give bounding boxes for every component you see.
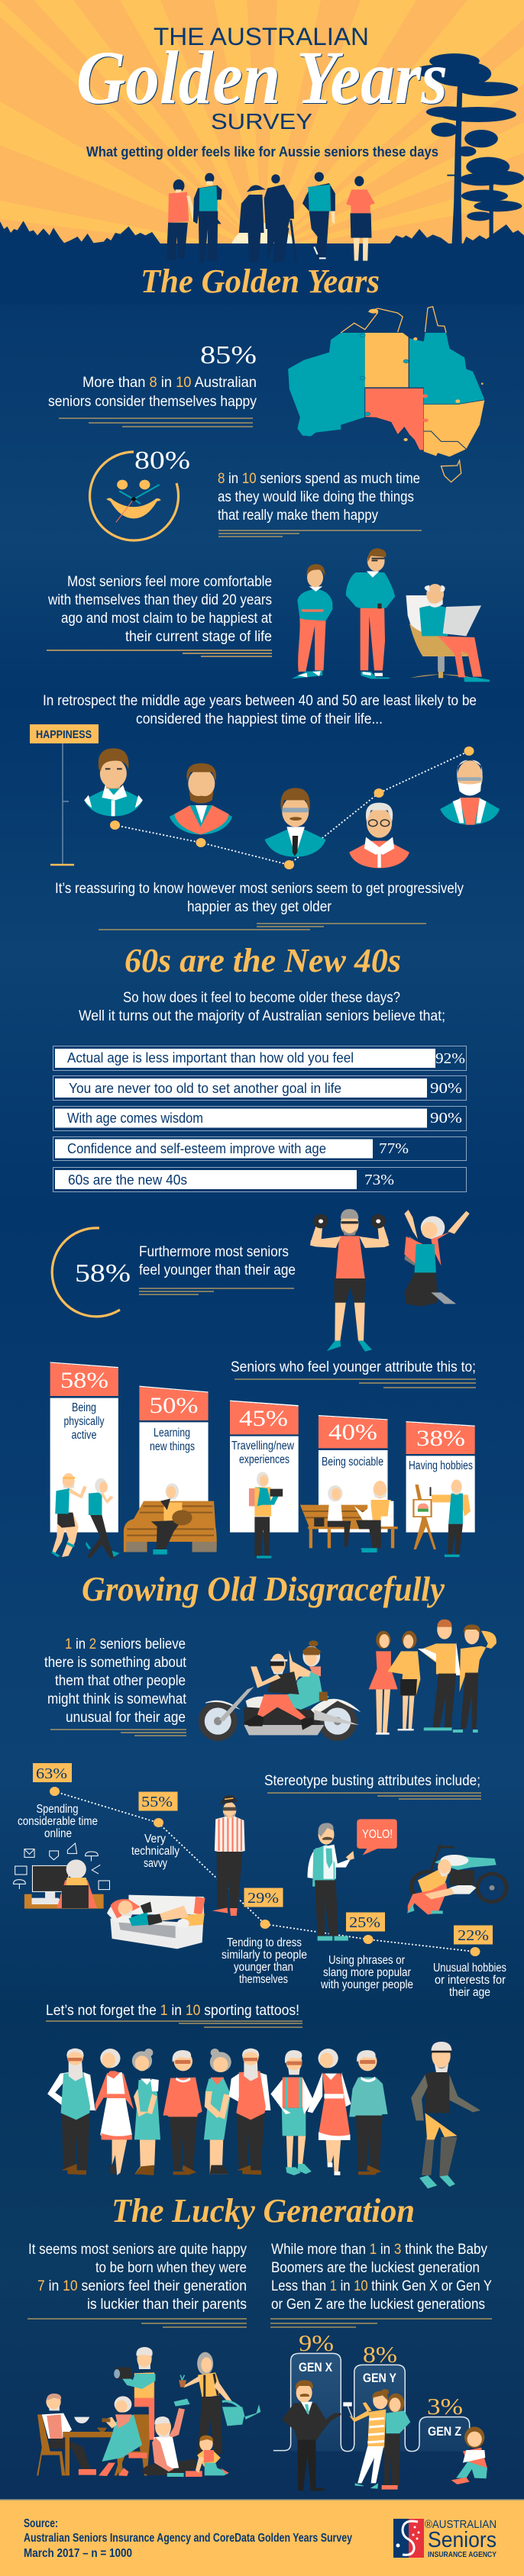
stat: 45 percent travelling: experiences	[239, 1453, 289, 1466]
text: intro: So how does it feel to become older these days?	[123, 990, 400, 1006]
panel: 80 percent time	[90, 447, 422, 540]
bar: 92 percent: Actual age is less important than how old you feel	[67, 1050, 354, 1066]
stat: 63 percent: considerable time	[18, 1815, 98, 1828]
illustration: couple on motorbike	[199, 1640, 361, 1741]
stat: 40 percent sociable	[322, 1420, 383, 1469]
illustration: hipster man	[212, 1795, 245, 1916]
text: lucky generation left: is luckier than their parents	[87, 2297, 247, 2313]
selfie girls	[343, 2389, 410, 2490]
sitting child	[451, 2426, 487, 2484]
stat: 29 percent: Tending to dress	[227, 1936, 302, 1949]
text: in retrospect: considered the happiest time of their life...	[136, 711, 383, 727]
labels: generation stats: 9%	[299, 2329, 334, 2356]
illustration: traveller with camera	[249, 1472, 283, 1559]
bar: 90 percent goal: 90%	[430, 1080, 462, 1097]
bar: 92 percent	[53, 1046, 466, 1070]
illustration: joggers	[52, 1473, 115, 1559]
illustration: three men	[292, 548, 490, 682]
stat: 38 percent hobbies	[409, 1426, 473, 1472]
glasses man	[346, 548, 395, 679]
subtitle: What getting older feels like for Aussie seniors these days	[86, 144, 438, 160]
text: unusual for their age	[66, 1710, 186, 1726]
icon: smiling clock	[90, 452, 179, 540]
bar: 77 percent: 77%	[379, 1140, 409, 1157]
woman	[167, 179, 198, 260]
senior 9	[349, 2050, 388, 2175]
text: reassuring: happier as they get older	[187, 899, 332, 915]
stat: 22 percent: Unusual hobbies	[433, 1962, 506, 1975]
labels: generation stats: GEN X	[299, 2360, 333, 2374]
seated man at table	[37, 2394, 96, 2475]
illustration: couple on bench	[300, 1481, 398, 1552]
text: 1 in 2 seniors believe	[65, 1636, 197, 1652]
senior 4	[163, 2050, 202, 2175]
labels: generation stats: GEN Z	[428, 2424, 461, 2439]
woman with watering can	[179, 2352, 260, 2454]
illustration: painter at easel	[412, 1479, 471, 1557]
bar: 90 percent goal	[53, 1076, 466, 1101]
stat: 50 percent learning: new things	[150, 1440, 195, 1453]
text: ago and most claim to be happiest at	[61, 611, 273, 627]
stat: 45 percent travelling	[231, 1406, 295, 1466]
face: older man	[349, 803, 409, 868]
bar: 90 percent wisdom: 90%	[430, 1110, 462, 1127]
text: Furthermore most seniors	[139, 1244, 289, 1260]
dotted trend line	[54, 1791, 475, 1952]
tree line and tall trees	[0, 53, 524, 244]
gen columns	[273, 2353, 470, 2452]
illustration: man with dumbbells	[310, 1209, 390, 1352]
bar: 90 percent wisdom	[53, 1107, 466, 1131]
source: March 2017 – n = 1000	[24, 2547, 132, 2560]
chart: stereotype busting attributes	[14, 1763, 509, 1999]
illustration: YOLO man	[307, 1823, 354, 1941]
boy	[346, 176, 375, 261]
logo: Australian Seniors Insurance Agency	[393, 2519, 497, 2559]
bar: 73 percent: 60s are the new 40s	[68, 1172, 187, 1188]
text: tattoos	[46, 2003, 302, 2027]
senior 2	[95, 2049, 134, 2175]
face: elderly bearded man	[440, 760, 500, 825]
stat: 80%	[134, 447, 190, 475]
man in teal	[193, 173, 222, 262]
stat: 63 percent: online	[44, 1827, 72, 1840]
labels: generation stats: 3%	[427, 2393, 463, 2420]
senior 1	[47, 2049, 95, 2175]
bar chart: beliefs	[53, 1046, 466, 1192]
face: man with moustache	[264, 788, 326, 857]
text: might think is somewhat	[47, 1691, 187, 1707]
text: there is something about	[44, 1655, 187, 1671]
stat: 29 percent: themselves	[239, 1973, 288, 1986]
shoes	[52, 1542, 377, 1557]
senior 8	[307, 2049, 351, 2175]
callout: YOLO	[357, 1819, 397, 1855]
ground	[0, 243, 524, 305]
stat: 25 percent	[320, 1913, 413, 1991]
logo: Australian Seniors Insurance Agency: ®AUSTRALIAN	[425, 2519, 497, 2531]
sun	[228, 223, 299, 293]
chart: luckiest generation	[273, 2329, 487, 2491]
stat: 58 percent physically active: 58%	[60, 1368, 108, 1393]
senior 7	[270, 2050, 313, 2175]
text: reassuring	[55, 881, 464, 930]
bar: 73 percent	[53, 1168, 466, 1192]
source: Australian Seniors Insurance Agency and CoreData Golden Years Survey	[24, 2532, 352, 2545]
stat: 25 percent: 25%	[349, 1914, 380, 1931]
senior 5	[204, 2049, 231, 2174]
illustration: man fixing motorbike	[407, 1845, 509, 1914]
text: lucky generation left: 7 in 10 seniors feel their generation	[37, 2278, 260, 2294]
text: lucky generation right: While more than 1 in 3 think the Baby	[271, 2242, 497, 2258]
stat: 25 percent: Using phrases or	[328, 1954, 405, 1967]
stat: 29 percent: younger than	[234, 1961, 293, 1974]
text: attributes intro	[231, 1359, 476, 1388]
column backgrounds	[50, 1362, 475, 1533]
text: that really make them happy	[218, 508, 378, 524]
stat: 63 percent: Spending	[37, 1803, 78, 1816]
man walking	[302, 172, 335, 260]
seated woman	[97, 2396, 152, 2476]
bar: 73 percent: 73%	[364, 1172, 394, 1188]
stat: 45 percent travelling: Travelling/new	[231, 1440, 295, 1452]
source: Source:	[24, 2517, 58, 2530]
stat: 50 percent learning: 50%	[150, 1393, 199, 1418]
stat: 45 percent travelling: 45%	[239, 1406, 288, 1431]
title	[76, 23, 448, 134]
title: SURVEY	[211, 110, 312, 134]
stat: 29 percent	[222, 1888, 307, 1986]
stat: 38 percent hobbies: Having hobbies	[409, 1459, 473, 1472]
logo: Australian Seniors Insurance Agency: Seniors	[428, 2528, 497, 2552]
labels: generation stats: 8%	[363, 2341, 397, 2368]
illustration: woman at computer with web icons	[14, 1843, 110, 1909]
stat: 58 percent physically active: Being	[72, 1401, 96, 1414]
heading: 60s are the New 40s: 60s are the New 40s	[125, 942, 401, 979]
text: More than 8 in 10 Australian	[82, 375, 259, 391]
illustration: woman reading on bench	[124, 1483, 217, 1555]
text: feel younger than their age	[139, 1262, 296, 1278]
text: seniors consider themselves happy	[48, 394, 257, 410]
panel: 85 percent happy	[48, 341, 257, 427]
face: bearded man	[170, 763, 232, 834]
text: them that other people	[55, 1673, 186, 1689]
chart: reasons for feeling younger	[50, 1362, 475, 1559]
bar: 77 percent: Confidence and self-esteem improve with age	[67, 1141, 326, 1156]
stat: 55 percent: 55%	[141, 1794, 173, 1810]
bar: 90 percent goal: You are never too old to set another goal in life	[69, 1081, 341, 1096]
text: lucky generation left	[27, 2242, 247, 2327]
suit man	[282, 2380, 341, 2491]
text: lucky generation right	[270, 2242, 492, 2327]
younger man	[292, 564, 332, 679]
man with camera	[114, 2347, 155, 2440]
stat: 58 percent physically active	[60, 1368, 108, 1442]
panel: 1 in 2 unusual	[44, 1620, 497, 1741]
text: lucky generation left: It seems most seniors are quite happy	[28, 2242, 247, 2258]
text: lucky generation right: or Gen Z are the luckiest generations	[271, 2297, 485, 2313]
ring gauge	[52, 1228, 120, 1317]
text: YOLO: YOLO!	[362, 1828, 393, 1841]
map of Australia	[288, 307, 484, 482]
text: Most seniors feel more comfortable	[67, 574, 272, 590]
dotted trend line	[115, 751, 469, 865]
stat: 85%	[200, 341, 257, 369]
text: stereotype heading	[264, 1773, 481, 1799]
bar: 90 percent wisdom: With age comes wisdom	[67, 1111, 203, 1126]
bar: 92 percent: 92%	[435, 1050, 465, 1067]
stat: 25 percent: with younger people	[320, 1978, 413, 1991]
stat: 40 percent sociable: Being sociable	[322, 1456, 383, 1469]
stat: 55 percent: technically	[131, 1845, 180, 1858]
stat: 22 percent: or interests for	[435, 1974, 506, 1987]
grandfather playing with car	[142, 2399, 202, 2477]
stat: 50 percent learning: Learning	[154, 1427, 190, 1440]
stat: 58%	[75, 1259, 131, 1288]
axis	[50, 743, 74, 865]
heading: Growing Old Disgracefully: Growing Old Disgracefully	[82, 1569, 445, 1608]
logo: Australian Seniors Insurance Agency: INSURANCE AGENCY	[428, 2551, 497, 2559]
stat: 29 percent: similarly to people	[222, 1949, 307, 1962]
illustration: line-up of seniors	[47, 2042, 480, 2188]
axis label: HAPPINESS: HAPPINESS	[36, 728, 92, 741]
text: reassuring: It’s reassuring to know however most seniors seem to get progressively	[55, 881, 464, 897]
stat: 38 percent hobbies: 38%	[416, 1426, 465, 1451]
text: in retrospect: In retrospect the middle age years between 40 and 50 are least likely to be	[43, 693, 477, 709]
stat: 29 percent: 29%	[247, 1890, 279, 1907]
bar: 77 percent	[53, 1137, 466, 1160]
illustration: man on sofa with tablet	[107, 1895, 205, 1949]
data points	[110, 746, 474, 869]
tattooed senior	[411, 2042, 480, 2188]
text: lucky generation left: to be born when they were	[95, 2260, 247, 2276]
text: their current stage of life	[125, 629, 272, 645]
stat: 55 percent: savvy	[144, 1857, 167, 1870]
text: as they would like doing the things	[218, 489, 414, 505]
stat: 55 percent: Very	[144, 1833, 166, 1846]
stat: 55 percent	[131, 1792, 180, 1870]
labels: generation stats: GEN Y	[363, 2371, 397, 2385]
text: attributes intro: Seniors who feel younger attribute this to;	[231, 1359, 476, 1375]
senior 6	[229, 2049, 270, 2175]
stat: 25 percent: slang more popular	[323, 1966, 411, 1979]
title: Golden Years	[76, 35, 448, 120]
column tops	[50, 1363, 475, 1454]
heading: The Lucky Generation: The Lucky Generation	[112, 2192, 415, 2229]
text: with themselves than they did 20 years	[47, 592, 272, 608]
family silhouettes walking toward the sun	[167, 172, 375, 262]
reading man in chair	[406, 584, 490, 682]
older man with cane	[264, 174, 296, 262]
illustration: jumping woman	[404, 1210, 470, 1307]
illustration: onlookers	[369, 1620, 497, 1735]
illustration: family activities	[37, 2347, 260, 2477]
text: lucky generation right: Less than 1 in 10 think Gen X or Gen Y	[271, 2278, 509, 2294]
panel: 58 percent feel younger	[52, 1228, 296, 1317]
stat: 58 percent physically active: physically	[64, 1415, 105, 1428]
labels: generation stats	[299, 2329, 463, 2439]
stat: 22 percent: their age	[449, 1986, 490, 1999]
stat: 40 percent sociable: 40%	[328, 1420, 377, 1445]
footer	[0, 2499, 524, 2576]
source	[24, 2517, 352, 2560]
axis label: HAPPINESS	[30, 724, 99, 743]
senior 3	[132, 2049, 160, 2175]
table	[63, 2432, 126, 2475]
heading: The Golden Years: The Golden Years	[141, 263, 380, 300]
text: lucky generation right: Boomers are the luckiest generation	[271, 2260, 480, 2276]
title: THE AUSTRALIAN	[154, 23, 369, 50]
panel: comfortable with themselves	[47, 548, 490, 682]
stat: 50 percent learning	[150, 1393, 199, 1453]
face: young man	[84, 748, 143, 816]
header banner	[0, 0, 524, 305]
stat: 63 percent: 63%	[36, 1765, 67, 1782]
stat: 22 percent: 22%	[458, 1927, 489, 1944]
text: 8 in 10 seniors spend as much time	[218, 471, 441, 487]
text: intro: Well it turns out the majority of Australian seniors believe that;	[79, 1008, 445, 1024]
text: tattoos: Let’s not forget the 1 in 10 sporting tattoos!	[46, 2003, 299, 2019]
chart: happiness by age	[30, 724, 500, 869]
older woman with hat	[239, 185, 266, 262]
child	[196, 2436, 229, 2475]
stat: 22 percent	[433, 1925, 506, 1999]
stat: 58 percent physically active: active	[72, 1429, 96, 1442]
text: stereotype heading: Stereotype busting attributes include;	[264, 1773, 480, 1789]
sunburst sky	[0, 0, 524, 252]
stat: 63 percent	[18, 1763, 98, 1840]
